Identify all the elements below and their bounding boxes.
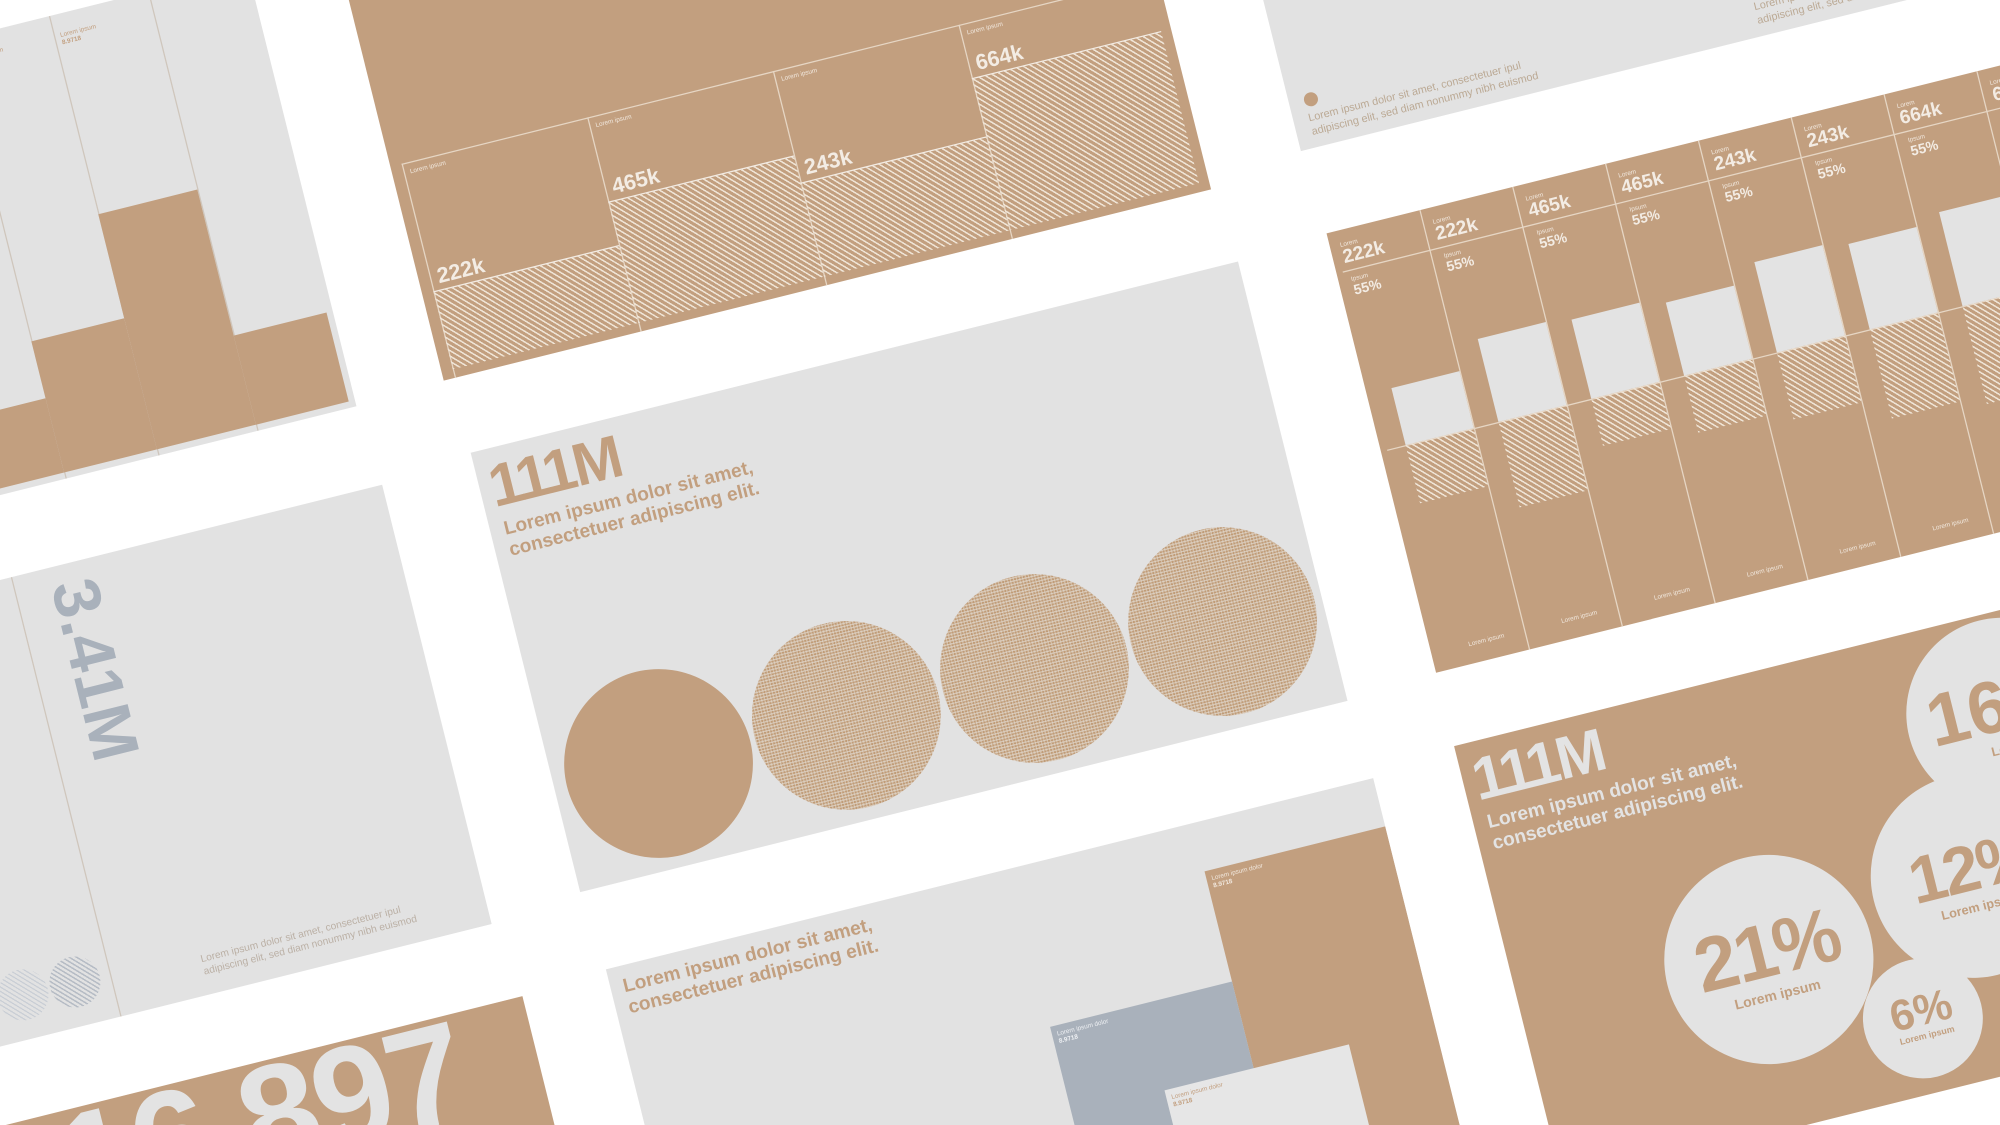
circle 21%: 21%: [1686, 891, 1847, 1009]
column headers: Ipsum: [1536, 226, 1555, 237]
panel: bottom-middle rectangles card: 8.9718: [1058, 1033, 1079, 1045]
panel: top staircase card: Lorem ipsum: [595, 113, 632, 130]
column headers: Lorem: [1525, 191, 1544, 203]
hatch column 3: [801, 136, 1010, 277]
text block: adipiscing elit, sed diam nonummy nibh euismod: [1310, 68, 1539, 137]
column headers: 664k: [1897, 98, 1944, 129]
panel: bottom-left 16,897 card: [0, 996, 632, 1125]
panel: bottom-middle rectangles card: Lorem ipsum dolor: [1171, 1081, 1224, 1102]
value 243k: 243k: [802, 144, 854, 180]
labels: 8.9718: [1213, 878, 1233, 890]
bar 3: [98, 190, 256, 449]
column headers: Lorem: [1618, 168, 1637, 180]
column headers: Lorem: [1339, 238, 1359, 250]
column headers: Lorem: [1896, 99, 1916, 111]
label: column 3: Lorem ipsum: [59, 23, 97, 39]
caption text: adipiscing elit, sed diam nonummy nibh euismod: [202, 913, 418, 977]
column headers: Lorem: [1710, 145, 1730, 157]
labels: Lorem ipsum dolor: [1211, 862, 1264, 883]
caption text: Lorem ipsum dolor sit amet, consectetuer ipul: [199, 904, 402, 965]
column headers: Lorem: [1432, 215, 1451, 226]
labels: Lorem ipsum: [409, 160, 447, 176]
bottom labels: Lorem ipsum: [1468, 632, 1505, 649]
circle 6%: [1850, 946, 1996, 1091]
icon: dot: [1302, 91, 1319, 108]
column headers: Ipsum: [1907, 133, 1926, 145]
bottom labels: Lorem ipsum: [1932, 517, 1969, 533]
column headers: 243k: [1805, 121, 1851, 152]
column headers: 55%: [1816, 161, 1847, 183]
circle solid: [544, 649, 773, 878]
column headers: Ipsum: [1350, 272, 1369, 284]
hatched circles: [0, 956, 100, 1020]
panel: top staircase card: Lorem ipsum: [781, 67, 818, 83]
column headers: 222k: [1340, 237, 1387, 268]
heading 111M: 111M: [1465, 715, 1610, 813]
value 465k: 465k: [609, 163, 662, 199]
value 222k: 222k: [435, 253, 487, 288]
light rectangle: [1164, 1044, 1397, 1125]
column headers: 465k: [1526, 190, 1573, 222]
column headers: 55%: [1909, 138, 1940, 160]
panel: top-right text card: [1191, 0, 2000, 151]
column headers: Ipsum: [1443, 249, 1462, 260]
column headers: Ipsum: [1814, 156, 1833, 168]
bottom labels: Lorem ipsum: [1653, 586, 1691, 602]
circle 6%: 6%: [1885, 980, 1957, 1042]
label: column 3: [59, 23, 97, 47]
column headers: 55%: [1445, 254, 1476, 275]
subtitle: Lorem ipsum dolor sit amet,: [621, 914, 875, 997]
bar 2: [31, 318, 157, 473]
panel: top-left bar chart card: [0, 0, 356, 598]
panel: 111M circles card: [471, 261, 1348, 892]
panel: top staircase card: Lorem ipsum: [966, 21, 1004, 37]
subtitle: consectetuer adipiscing elit.: [1490, 771, 1745, 854]
column headers: 55%: [1538, 230, 1569, 252]
circle textured 1: [732, 601, 961, 830]
circle textured 2: [920, 554, 1149, 783]
circle 21%: Lorem ipsum: [1733, 977, 1822, 1013]
circle 16%: [1886, 597, 2000, 829]
column headers: 55%: [1723, 184, 1754, 206]
blue-grey rectangle: [1050, 982, 1302, 1125]
circle textured 3: [1108, 507, 1337, 736]
circle 12%: [1849, 752, 2000, 1000]
bottom labels: Lorem ipsum: [1839, 540, 1877, 556]
column headers: 243k: [1712, 144, 1758, 176]
heading 111M: 111M: [481, 422, 627, 520]
label: column 3: 8.9718: [61, 35, 82, 47]
bar 1: [0, 398, 64, 496]
column headers: 55%: [1631, 207, 1662, 229]
subtitle: consectetuer adipiscing elit.: [626, 935, 881, 1019]
column headers: 222k: [1433, 214, 1480, 245]
column headers: [1339, 75, 2000, 298]
hatch column 4: [972, 31, 1199, 230]
bars: [1392, 197, 2000, 508]
bottom labels: [1468, 517, 1969, 649]
subtitle: Lorem ipsum dolor sit amet,: [502, 457, 755, 540]
bottom labels: Lorem ipsum: [1746, 563, 1784, 579]
panel: right bar columns card: [1327, 42, 2000, 673]
panel: 3.41M card: [0, 485, 492, 1115]
hatch column 1: [433, 245, 638, 369]
bottom labels: Lorem ipsum: [1560, 609, 1598, 626]
subtitle: consectetuer adipiscing elit.: [507, 478, 762, 561]
panel: top staircase card: [334, 0, 1211, 381]
circle 21%: [1642, 833, 1896, 1086]
panel: bottom-right percentages card: [1454, 555, 2000, 1125]
hatch column 2: [608, 155, 824, 323]
value 664k: 664k: [973, 40, 1026, 75]
column headers: Ipsum: [1722, 179, 1740, 191]
bar 4: [234, 312, 349, 425]
panel: bottom-middle rectangles card: Lorem ipsum dolor: [1056, 1018, 1109, 1038]
panel: bottom-middle rectangles card: 8.9718: [1173, 1097, 1193, 1109]
text block: Lorem ipsum dolor sit amet, consectetuer ipul: [1307, 59, 1522, 124]
column headers: 465k: [1619, 167, 1665, 199]
column headers: 55%: [1352, 277, 1383, 298]
column headers: Lorem: [1803, 122, 1823, 134]
panel: bottom-middle rectangles card: [606, 778, 1483, 1125]
big number 3.41M: 3.41M: [36, 571, 153, 768]
subtitle: Lorem ipsum dolor sit amet,: [1485, 750, 1739, 833]
tan rectangle: [1205, 826, 1483, 1125]
circle 6%: Lorem ipsum: [1899, 1025, 1956, 1047]
column headers: Ipsum: [1629, 202, 1648, 214]
